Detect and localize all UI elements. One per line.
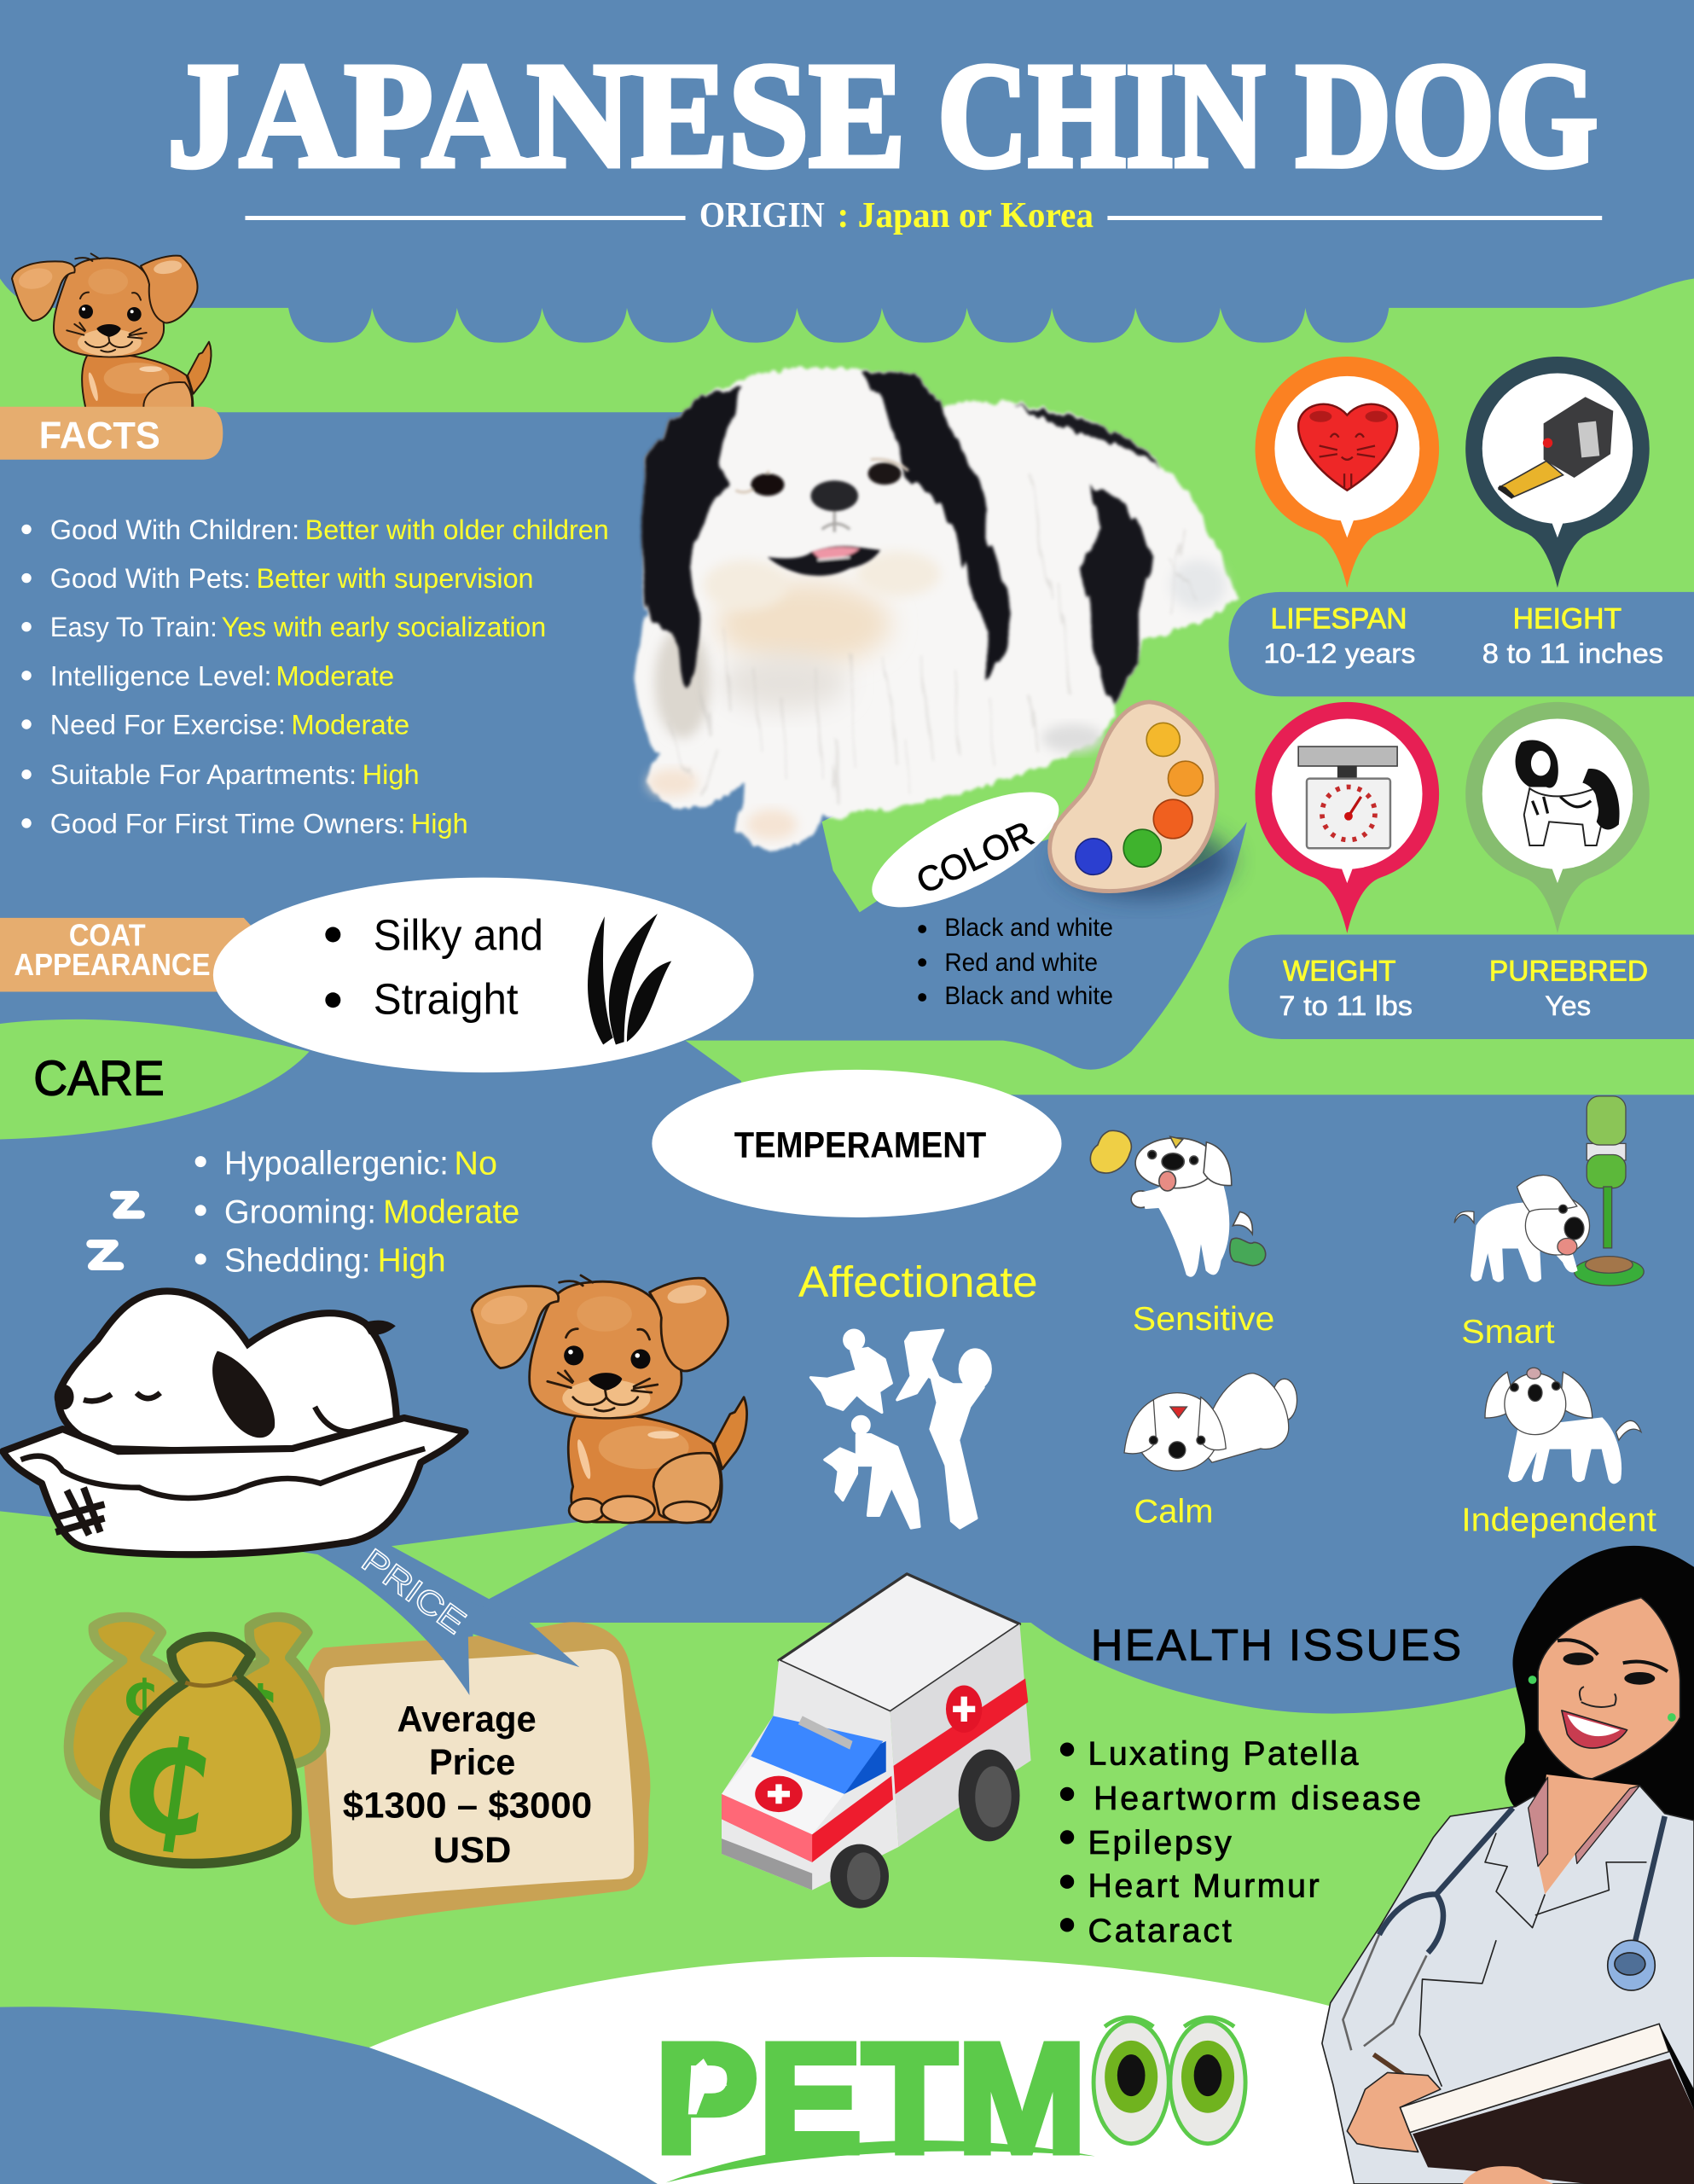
health issues list: Heartworm disease xyxy=(1094,1780,1421,1817)
facts list: Better with supervision xyxy=(257,562,534,594)
icon: money bags: ₵ xyxy=(123,1669,158,1728)
icon: scale xyxy=(1298,746,1397,848)
price board xyxy=(303,1622,650,1925)
trait: sensitive xyxy=(1090,1130,1274,1338)
facts list: Easy To Train: xyxy=(50,611,218,642)
title: JAPANESE xyxy=(167,32,906,199)
coat appearance tag: COAT xyxy=(69,918,146,953)
icon: eyes xyxy=(1094,2018,1245,2144)
facts list: Good With Children: xyxy=(50,514,299,545)
coat ellipse: Straight xyxy=(374,975,519,1024)
pin: weight xyxy=(1256,702,1439,933)
coat ellipse xyxy=(213,878,754,1072)
panel: lifespan and height xyxy=(1229,592,1694,696)
health issues list xyxy=(1060,1736,1421,1949)
facts list: Intelligence Level: xyxy=(50,659,271,691)
icon: small puppy xyxy=(12,253,211,433)
header band with scallops xyxy=(0,0,1694,343)
panel: weight and purebred xyxy=(1229,935,1694,1039)
trait: smart: Smart xyxy=(1461,1314,1555,1350)
panel: lifespan and height: 8 to 11 inches xyxy=(1482,637,1663,669)
icon: dog lying down xyxy=(1124,1374,1297,1471)
icon: large puppy xyxy=(472,1275,747,1523)
price board: USD xyxy=(433,1830,511,1870)
logo: petmoo: PETM xyxy=(655,2010,1087,2184)
trait: affectionate xyxy=(798,1258,1038,1528)
color list xyxy=(918,914,1113,1010)
origin line: : Japan or Korea xyxy=(838,195,1094,235)
health issues list: Luxating Patella xyxy=(1088,1736,1359,1773)
icon: dog sleeping in basket xyxy=(3,1291,465,1554)
coat appearance tag xyxy=(0,918,279,991)
blue main body xyxy=(0,412,1694,1714)
footer blue corner xyxy=(0,2007,658,2184)
facts list: High xyxy=(411,807,468,839)
green wedge below puppy xyxy=(392,1513,651,1599)
panel: lifespan and height: 10-12 years xyxy=(1263,637,1415,669)
price board: Average xyxy=(397,1699,537,1739)
price swoosh xyxy=(317,1542,579,1695)
color label: COLOR xyxy=(910,813,1039,901)
pin: lifespan xyxy=(1256,357,1439,588)
trait: calm xyxy=(1124,1374,1297,1530)
care list: Hypoallergenic: xyxy=(224,1145,449,1182)
icon: standing dog xyxy=(1485,1368,1641,1484)
origin line xyxy=(245,195,1602,235)
icon: hair strands xyxy=(588,914,671,1044)
icon: heart xyxy=(1298,404,1397,491)
facts tag: FACTS xyxy=(39,415,160,457)
facts list: Need For Exercise: xyxy=(50,708,286,740)
temperament ellipse: TEMPERAMENT xyxy=(734,1125,986,1165)
health issues list: Epilepsy xyxy=(1088,1825,1232,1862)
panel: weight and purebred: Yes xyxy=(1545,990,1591,1021)
health issues list: Heart Murmur xyxy=(1088,1868,1320,1905)
color list: Black and white xyxy=(944,982,1113,1010)
green care patch xyxy=(0,1019,310,1140)
care list: Shedding: xyxy=(224,1243,370,1280)
coat appearance tag: APPEARANCE xyxy=(14,947,211,982)
facts list: Moderate xyxy=(276,659,394,691)
panel: lifespan and height: HEIGHT xyxy=(1513,602,1621,635)
trait: affectionate: Affectionate xyxy=(798,1258,1038,1306)
panel: weight and purebred: WEIGHT xyxy=(1283,955,1396,987)
color list: Red and white xyxy=(944,949,1098,977)
coat ellipse: Silky and xyxy=(374,910,543,959)
icon: dog scratching xyxy=(1090,1130,1266,1276)
icon: tape measure xyxy=(1499,397,1613,497)
price board: $1300 – $3000 xyxy=(343,1786,592,1826)
care list xyxy=(195,1145,519,1280)
icon: paint palette xyxy=(1050,702,1232,897)
care list: Grooming: xyxy=(224,1194,376,1230)
color list: Black and white xyxy=(944,914,1113,942)
icon: money bags: ₵ xyxy=(111,1709,220,1868)
facts list: Better with older children xyxy=(305,514,609,545)
trait: independent xyxy=(1461,1368,1656,1538)
care list: Moderate xyxy=(383,1194,519,1230)
trait: independent: Independent xyxy=(1461,1502,1656,1538)
health issues list: Cataract xyxy=(1088,1913,1232,1949)
doctor illustration xyxy=(1322,1546,1694,2184)
pin: height xyxy=(1465,357,1650,588)
origin line: ORIGIN xyxy=(699,195,825,235)
facts list: Good With Pets: xyxy=(50,562,251,594)
panel: weight and purebred: 7 to 11 lbs xyxy=(1279,990,1413,1021)
care list: High xyxy=(378,1243,446,1280)
title: DOG xyxy=(1296,32,1598,199)
facts tag xyxy=(0,407,223,460)
care heading: CARE xyxy=(33,1051,165,1106)
facts list xyxy=(21,514,609,839)
facts list: Suitable For Apartments: xyxy=(50,758,357,790)
title xyxy=(167,32,1598,199)
health issues heading: HEALTH ISSUES xyxy=(1091,1621,1461,1670)
trait: smart xyxy=(1454,1096,1644,1350)
title: CHIN xyxy=(937,32,1265,199)
facts list: Yes with early socialization xyxy=(222,611,546,642)
temperament ellipse xyxy=(652,1070,1062,1217)
icon: sleeping z marks xyxy=(90,1195,141,1266)
icon: dog at feeder xyxy=(1454,1096,1644,1286)
pin: purebred xyxy=(1465,702,1650,933)
price board: Price xyxy=(429,1742,515,1782)
icon: line art chin dog xyxy=(1516,741,1620,845)
trait: sensitive: Sensitive xyxy=(1133,1301,1274,1338)
panel: weight and purebred: PUREBRED xyxy=(1489,955,1648,987)
care list: No xyxy=(454,1145,497,1182)
photo: japanese chin dog xyxy=(635,368,1237,850)
footer white panel xyxy=(369,1957,1407,2184)
facts list: High xyxy=(363,758,420,790)
icon: people with dogs silhouettes xyxy=(811,1330,990,1528)
price swoosh: PRICE xyxy=(355,1542,473,1641)
facts list: Moderate xyxy=(291,708,409,740)
facts list: Good For First Time Owners: xyxy=(50,807,405,839)
color label xyxy=(856,770,1075,930)
panel: lifespan and height: LIFESPAN xyxy=(1270,602,1407,635)
trait: calm: Calm xyxy=(1134,1493,1214,1530)
icon: ambulance xyxy=(722,1574,1031,1908)
icon: money bags xyxy=(68,1617,325,1868)
icon: money bags: ₵ xyxy=(231,1673,278,1751)
